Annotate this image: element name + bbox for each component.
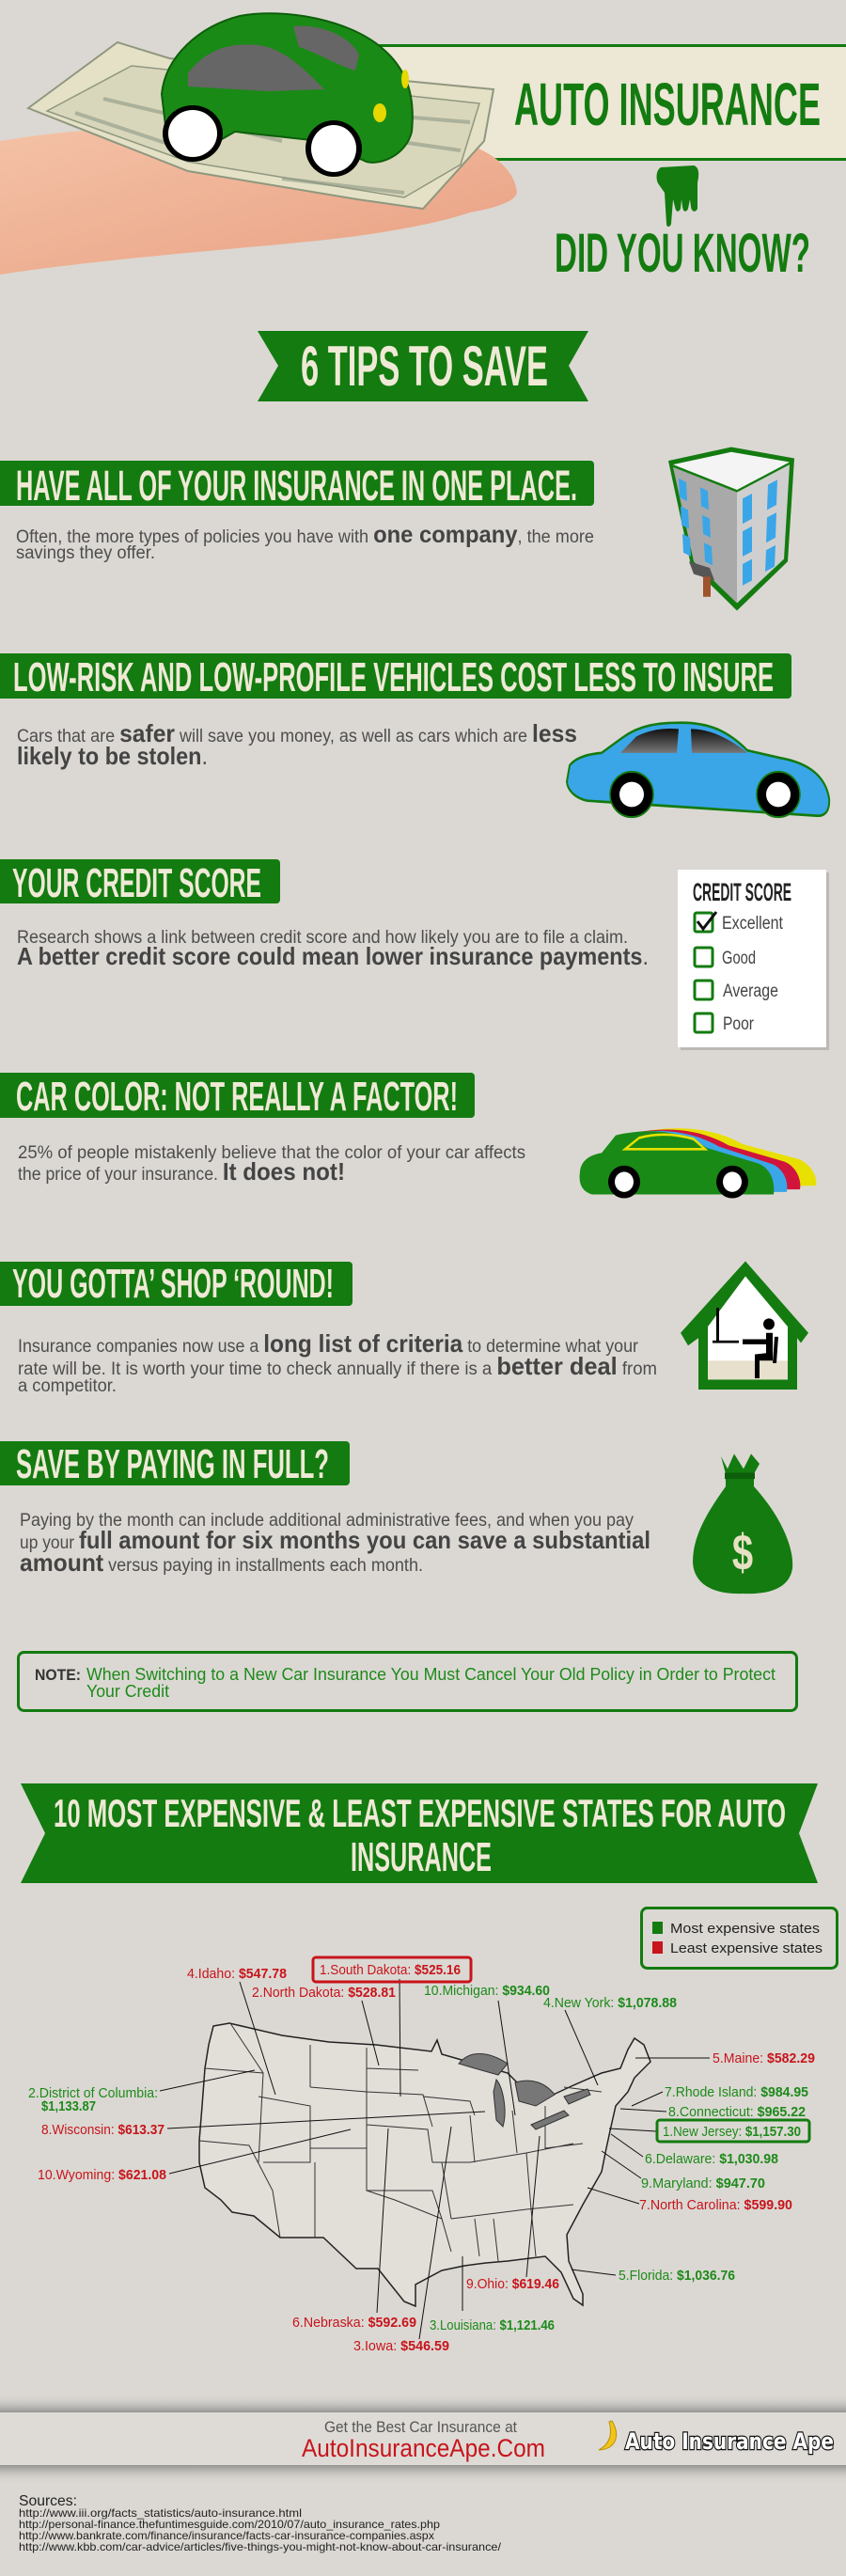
state labels: 3.Louisiana: $1,121.46 <box>430 2317 555 2333</box>
tip 4 text: the price of your insurance. It does not! <box>18 1157 345 1186</box>
sources: http://www.kbb.com/car-advice/articles/five-things-you-might-not-know-about-car-insurance/ <box>19 2540 502 2553</box>
icon: rainbow cars <box>580 1128 816 1199</box>
tip 5 text <box>18 1329 657 1396</box>
illustration: hand holding money and car <box>0 13 517 275</box>
icon: banana <box>599 2421 617 2450</box>
state labels: 3.Iowa: $546.59 <box>353 2338 449 2354</box>
sources: http://www.bankrate.com/finance/insurance/facts-car-insurance-companies.aspx <box>19 2529 434 2542</box>
tip 4 heading: CAR COLOR: NOT REALLY A FACTOR! <box>16 1074 458 1120</box>
icon: money bag <box>693 1453 792 1594</box>
tip 5 heading: YOU GOTTA’ SHOP ‘ROUND! <box>12 1261 334 1307</box>
icon: green car <box>162 13 413 177</box>
ribbon: 6 tips to save: 6 TIPS TO SAVE <box>301 335 548 398</box>
icon: building <box>668 447 794 611</box>
state labels: 6.Delaware: $1,030.98 <box>645 2151 778 2167</box>
state labels: $1,133.87 <box>41 2098 96 2114</box>
tip 6 text: up your full amount for six months you can save a substantial <box>20 1526 650 1554</box>
ribbon: states heading: INSURANCE <box>351 1834 492 1880</box>
tip 4 text: 25% of people mistakenly believe that the color of your car affects <box>18 1143 525 1163</box>
icon: house with person at computer <box>681 1261 808 1390</box>
state labels: 9.Ohio: $619.46 <box>466 2276 559 2292</box>
tip 1 text: Often, the more types of policies you have with one company, the more <box>16 522 594 548</box>
tip 1 heading <box>0 461 594 510</box>
legend: Most expensive states <box>670 1921 820 1937</box>
note box: When Switching to a New Car Insurance You Must Cancel Your Old Policy in Order to Protect <box>86 1665 776 1684</box>
state labels: 7.North Carolina: $599.90 <box>639 2197 792 2213</box>
ribbon: 6 tips to save <box>258 331 588 401</box>
state labels: 6.Nebraska: $592.69 <box>292 2315 416 2331</box>
state labels: 5.Maine: $582.29 <box>713 2050 815 2066</box>
tip 4 text <box>18 1143 525 1186</box>
footer band: AutoInsuranceApe.Com <box>302 2434 545 2462</box>
tip 3 heading <box>0 859 280 906</box>
tip 3 text <box>17 928 649 970</box>
US map <box>199 2023 650 2306</box>
tip 2 text <box>17 719 577 770</box>
icon: money bag: $ <box>732 1525 753 1581</box>
state labels: 2.North Dakota: $528.81 <box>252 1985 396 2001</box>
tip 1 text: savings they offer. <box>16 543 155 563</box>
tip 5 text: Insurance companies now use a long list of criteria to determine what your <box>18 1329 639 1358</box>
state labels: 2.District of Columbia: <box>28 2085 158 2101</box>
state labels <box>28 1957 815 2354</box>
note box <box>19 1653 797 1711</box>
tip 1 text <box>16 522 594 563</box>
sources <box>19 2493 502 2553</box>
state labels: 10.Michigan: $934.60 <box>424 1983 550 1999</box>
tip 4 heading <box>0 1073 475 1120</box>
legend: Least expensive states <box>670 1940 822 1956</box>
state labels: 8.Connecticut: $965.22 <box>668 2104 806 2120</box>
tip 2 text: likely to be stolen. <box>17 742 208 770</box>
state labels: 1.South Dakota: $525.16 <box>320 1962 461 1978</box>
leader lines <box>160 1979 710 2339</box>
state labels: 7.Rhode Island: $984.95 <box>665 2084 808 2100</box>
footer band <box>0 2394 846 2484</box>
tip 6 heading <box>0 1441 350 1487</box>
tip 6 text <box>20 1511 650 1577</box>
tip 2 text: Cars that are safer will save you money, as well as cars which are less <box>17 719 577 747</box>
legend <box>641 1908 837 1969</box>
note box: Your Credit <box>86 1682 169 1701</box>
state labels: 4.Idaho: $547.78 <box>187 1966 287 1982</box>
footer call to action: Get the Best Car Insurance at <box>324 2418 517 2436</box>
tip 3 text: A better credit score could mean lower insurance payments. <box>17 942 649 970</box>
credit score card: Poor <box>723 1014 755 1034</box>
credit score card: Average <box>723 982 778 1001</box>
tip 6 heading: SAVE BY PAYING IN FULL? <box>16 1441 329 1487</box>
tip 3 text: Research shows a link between credit score and how likely you are to file a claim. <box>17 928 628 948</box>
credit score card: Excellent <box>722 914 784 934</box>
sources: Sources: <box>19 2493 77 2509</box>
tip 6 text: amount versus paying in installments each month. <box>20 1548 423 1577</box>
title banner <box>371 44 846 161</box>
credit score card: Good <box>722 949 756 968</box>
ribbon: states heading <box>21 1783 818 1883</box>
state labels: 10.Wyoming: $621.08 <box>38 2167 166 2183</box>
icon: blue car <box>567 723 829 817</box>
credit score card <box>678 870 829 1050</box>
note box: NOTE: <box>35 1666 81 1684</box>
state labels: 4.New York: $1,078.88 <box>543 1995 677 2011</box>
tip 3 heading: YOUR CREDIT SCORE <box>12 860 261 906</box>
icon: pointing hand <box>657 165 698 227</box>
tip 5 text: rate will be. It is worth your time to check annually if there is a better deal from <box>18 1352 657 1380</box>
state labels: 1.New Jersey: $1,157.30 <box>663 2124 801 2140</box>
sources: http://www.iii.org/facts_statistics/auto-insurance.html <box>19 2506 302 2520</box>
state labels: 8.Wisconsin: $613.37 <box>41 2122 164 2138</box>
tip 5 text: a competitor. <box>18 1376 117 1396</box>
tip 6 text: Paying by the month can include additional administrative fees, and when you pay <box>20 1511 634 1531</box>
state labels: 5.Florida: $1,036.76 <box>619 2268 735 2284</box>
sources: http://personal-finance.thefuntimesguide.com/2010/07/auto_insurance_rates.php <box>19 2518 440 2531</box>
tip 5 heading <box>0 1261 352 1307</box>
state labels: 9.Maryland: $947.70 <box>641 2175 765 2191</box>
